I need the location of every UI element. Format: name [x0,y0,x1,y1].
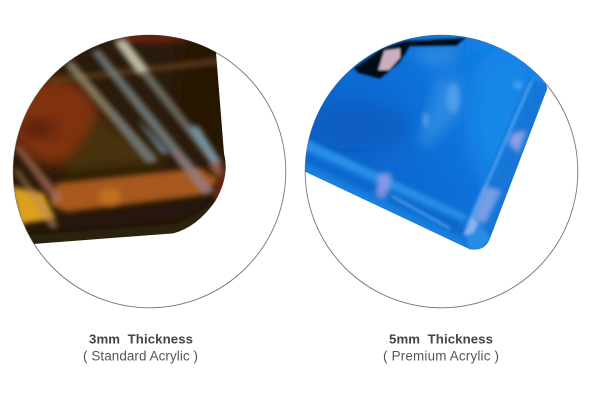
infographic: acrylic thickness comparison [12,34,578,364]
panel: 5mm premium acrylic [295,20,578,308]
caption title: 5mm: 5mm Thickness [389,332,493,346]
panel: 3mm standard acrylic [0,20,286,308]
caption subtitle: premium acrylic: ( Premium Acrylic ) [383,348,499,364]
caption subtitle: standard acrylic: ( Standard Acrylic ) [83,348,198,364]
caption title: 3mm: 3mm Thickness [89,332,193,346]
photo: dark orange acrylic corner [13,35,226,244]
caption: 5mm thickness [383,332,499,364]
outline circle: 3mm [13,35,286,308]
photo: blue acrylic corner [305,35,548,250]
caption: 3mm thickness [83,332,198,364]
outline circle: 5mm [305,35,578,308]
